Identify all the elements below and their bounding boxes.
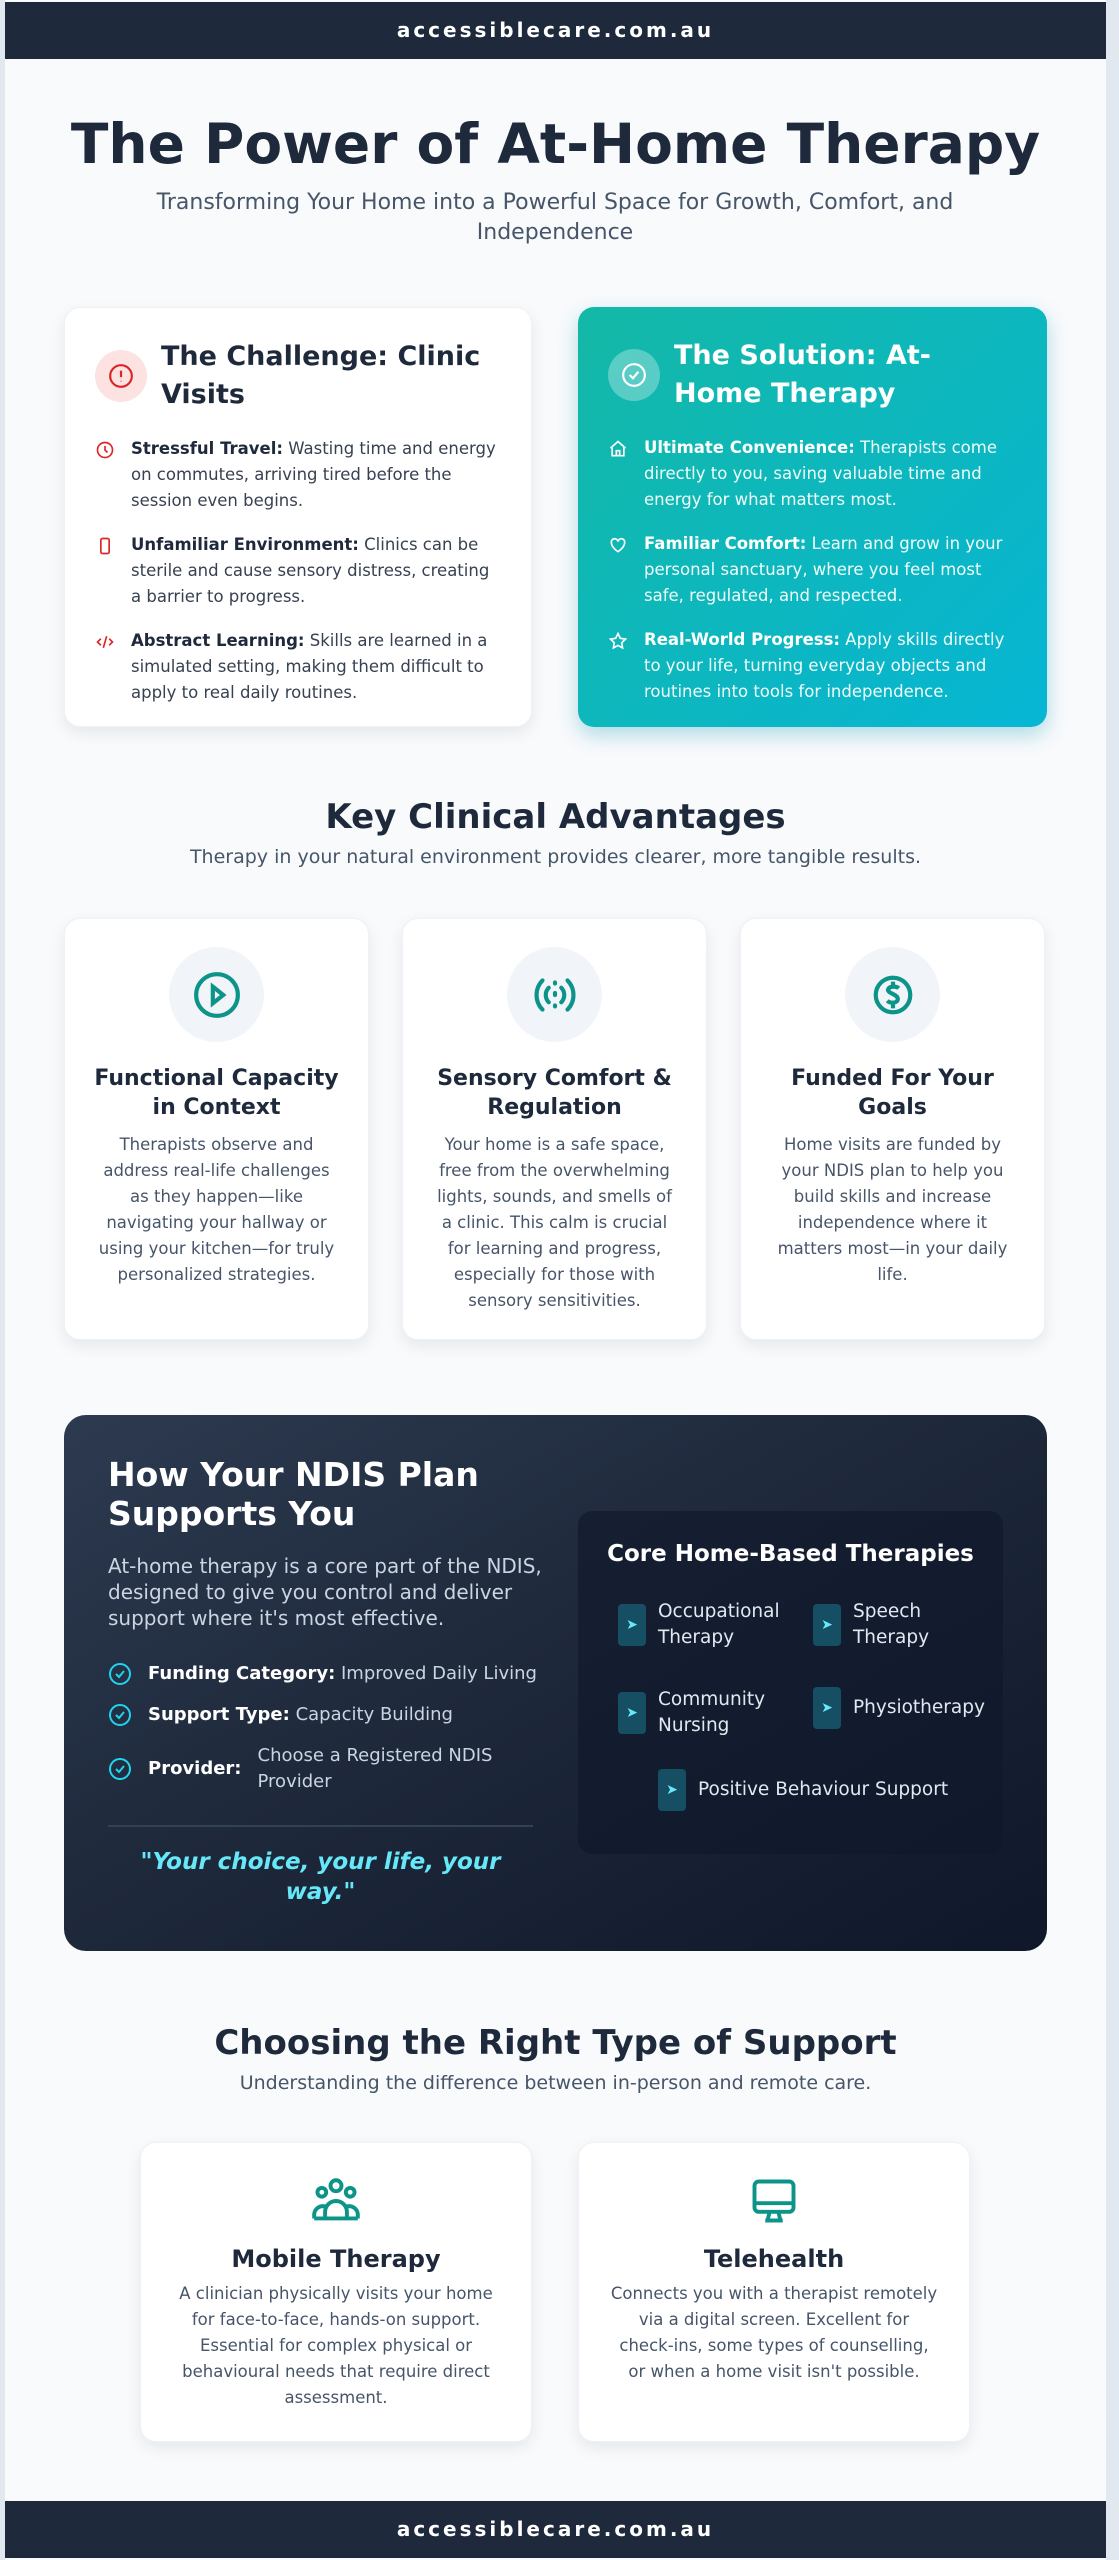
solution items: energy for what matters most. (644, 490, 897, 509)
panel: NDIS plan (64, 1415, 1047, 1951)
quote: "Your choice, your life, your way." (140, 1849, 500, 1905)
subheading: Understanding the difference between in-person and remote care. (240, 2072, 871, 2094)
card: functional capacity: Therapists observe and address real-life challenges as they happen—like navigating your hallway or using your kitchen—for truly personalized strategies. (99, 1135, 334, 1284)
card: telehealth: or when a home visit isn't possible. (628, 2362, 920, 2381)
challenge items: Abstract Learning: Skills are learned in a (131, 631, 487, 650)
solution heading (608, 340, 931, 409)
therapy list: Positive Behaviour Support (698, 1779, 948, 1800)
solution items (608, 438, 1004, 701)
card: funded: Goals (858, 1095, 927, 1120)
card: funded: Funded For Your (791, 1066, 994, 1091)
checklist (109, 1663, 537, 1792)
NDIS paragraph: At-home therapy is a core part of the NDIS, designed to give you control and deliver support where it's most effective. (108, 1554, 542, 1630)
therapy list: ➤ (821, 1700, 833, 1716)
challenge items: sterile and cause sensory distress, creating (131, 561, 489, 580)
panel: core therapies (578, 1511, 1003, 1854)
solution items: personal sanctuary, where you feel most (644, 560, 981, 579)
NDIS heading: How Your NDIS Plan Supports You (108, 1455, 479, 1533)
solution heading: The Solution: At- (674, 340, 931, 371)
challenge items: Stressful Travel: Wasting time and energy (131, 439, 496, 458)
challenge items: apply to real daily routines. (131, 683, 357, 702)
challenge items: simulated setting, making them difficult to (131, 657, 484, 676)
checklist: Choose a Registered NDIS Provider (258, 1745, 492, 1792)
solution items: to your life, turning everyday objects and (644, 656, 986, 675)
challenge heading: Visits (161, 379, 245, 410)
subheading: Therapy in your natural environment provides clearer, more tangible results. (190, 846, 921, 868)
title: The Power of At-Home Therapy (71, 112, 1040, 176)
card: telehealth: via a digital screen. Excellent for (639, 2310, 909, 2329)
icon: dollar (845, 947, 940, 1042)
card: mobile therapy (140, 2142, 532, 2442)
card: functional capacity: in Context (153, 1095, 280, 1120)
checklist: Support Type: Capacity Building (148, 1704, 453, 1725)
header bar: accessiblecare.com.au (397, 18, 714, 42)
therapy list: ➤ (666, 1782, 678, 1798)
challenge items: Unfamiliar Environment: Clinics can be (131, 535, 478, 554)
card: telehealth (578, 2142, 970, 2442)
panel: solution (578, 307, 1047, 727)
icon: signal (507, 947, 602, 1042)
therapy list: Community (658, 1689, 765, 1710)
header bar (5, 2, 1106, 59)
therapy list: Nursing (658, 1715, 729, 1736)
card: mobile therapy: Mobile Therapy (231, 2245, 441, 2273)
checklist: Funding Category: Improved Daily Living (148, 1663, 537, 1684)
heading: choosing support: Choosing the Right Type of Support (214, 2023, 897, 2063)
subtitle: Transforming Your Home into a Powerful Space for Growth, Comfort, and Independence (157, 190, 953, 245)
heading: key clinical advantages: Key Clinical Advantages (325, 797, 786, 837)
challenge heading: The Challenge: Clinic (161, 341, 480, 372)
card: telehealth: Connects you with a therapist remotely (611, 2284, 937, 2303)
therapy list: Therapy (658, 1627, 734, 1648)
card: telehealth: Telehealth (704, 2245, 844, 2273)
footer bar: accessiblecare.com.au (397, 2517, 714, 2541)
solution items: Real-World Progress: Apply skills directly (644, 630, 1004, 649)
therapy list: Occupational (658, 1601, 780, 1622)
challenge items: on commutes, arriving tired before the (131, 465, 452, 484)
challenge items: a barrier to progress. (131, 587, 305, 606)
card: mobile therapy: A clinician physically visits your home for face-to-face, hands-on support. Essential for complex physical or behavioural needs that require direct assessment. (179, 2284, 493, 2407)
card: functional capacity: Functional Capacity (94, 1066, 339, 1091)
challenge heading (95, 341, 480, 410)
icon: people (312, 2178, 360, 2220)
icon: monitor (752, 2180, 796, 2222)
therapy list: Speech (853, 1601, 921, 1622)
solution heading: Home Therapy (674, 378, 895, 409)
icon: play (169, 947, 264, 1042)
therapy list: Physiotherapy (853, 1697, 985, 1718)
footer bar (5, 2501, 1106, 2558)
checklist: Provider: (148, 1758, 242, 1779)
card: sensory comfort: Sensory Comfort & (437, 1066, 672, 1091)
card: functional capacity (64, 918, 369, 1340)
card: sensory comfort: Your home is a safe space, free from the overwhelming lights, sounds, and smells of a clinic. This calm is crucial for learning and progress, especially for those with sensory sensitivities. (437, 1135, 672, 1310)
solution items: Ultimate Convenience: Therapists come (644, 438, 997, 457)
card: funded (740, 918, 1045, 1340)
solution items: safe, regulated, and respected. (644, 586, 902, 605)
challenge items (96, 439, 496, 702)
therapy list (618, 1601, 985, 1811)
card: sensory comfort (402, 918, 707, 1340)
card: telehealth: check-ins, some types of counselling, (619, 2336, 929, 2355)
challenge items: session even begins. (131, 491, 303, 510)
core heading: Core Home-Based Therapies (607, 1541, 974, 1567)
solution items: directly to you, saving valuable time and (644, 464, 982, 483)
solution items: Familiar Comfort: Learn and grow in your (644, 534, 1002, 553)
therapy list: ➤ (626, 1705, 638, 1721)
card: sensory comfort: Regulation (487, 1095, 622, 1120)
card: funded: Home visits are funded by your NDIS plan to help you build skills and increase independence where it matters most—in your daily life. (778, 1135, 1007, 1284)
therapy list: Therapy (853, 1627, 929, 1648)
therapy list: ➤ (821, 1617, 833, 1633)
solution items: routines into tools for independence. (644, 682, 949, 701)
panel: challenge (64, 307, 532, 727)
therapy list: ➤ (626, 1617, 638, 1633)
